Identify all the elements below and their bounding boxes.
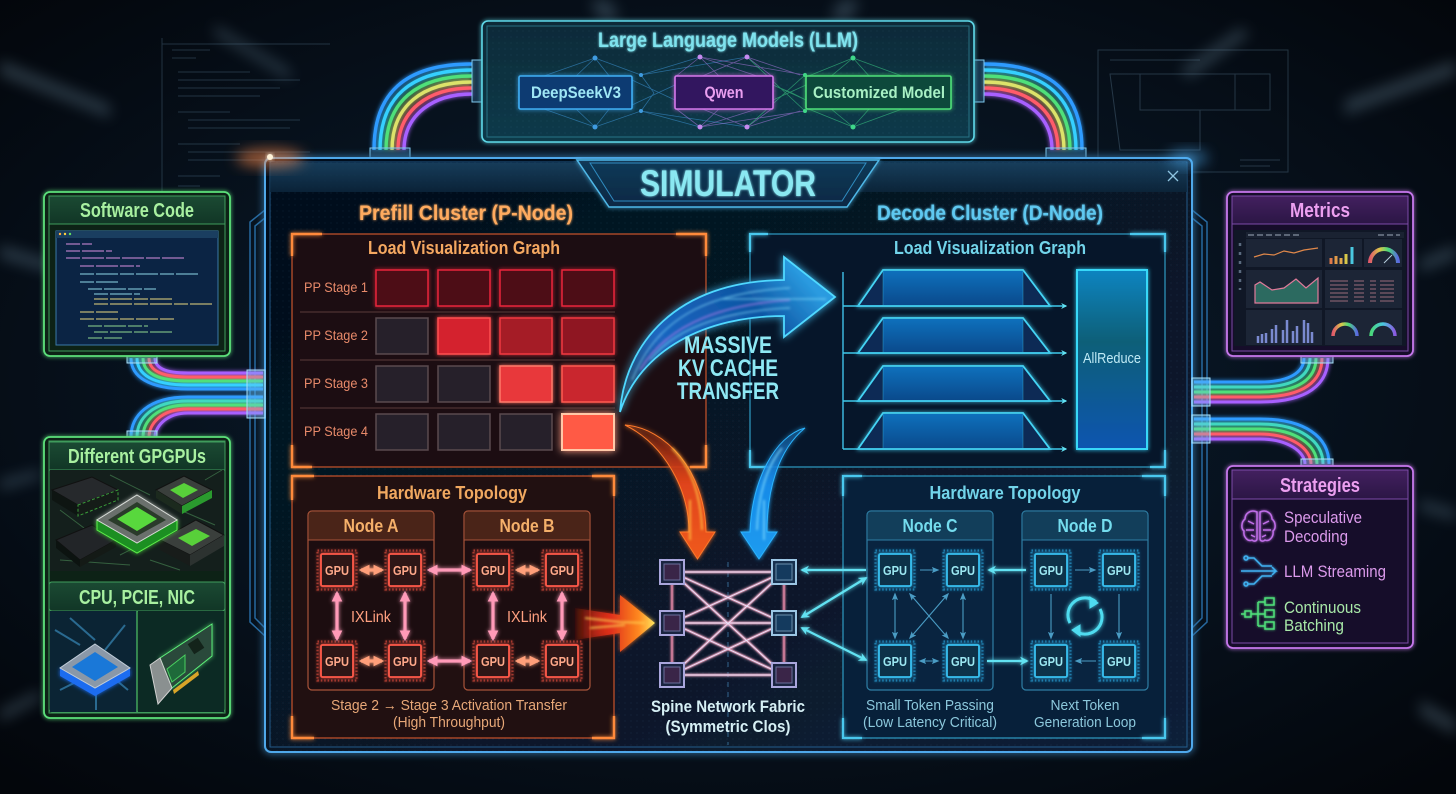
topology captions: (Low Latency Critical) (863, 714, 997, 731)
arrow: topology to spine (575, 595, 655, 652)
topology caption: (High Throughput) (393, 714, 505, 731)
Node A: GPU (325, 563, 349, 578)
stage activity heatmap (376, 270, 614, 450)
panel: Different GPGPUs and CPU (44, 437, 230, 718)
label: massive KV cache transfer: MASSIVE (684, 332, 772, 359)
connector cables: LLM to simulator left (374, 64, 472, 150)
model box: Customized Model (806, 76, 951, 109)
Node B: Node B (500, 516, 555, 536)
side cables: left (131, 358, 263, 437)
y axis (842, 272, 844, 449)
Node A (308, 511, 434, 690)
Node B: GPU (481, 654, 505, 669)
heading: Strategies (1280, 475, 1360, 497)
label: speculative decoding: Decoding (1284, 527, 1348, 546)
connector cables: LLM to simulator right (984, 64, 1082, 150)
label: continuous batching: Batching (1284, 616, 1344, 635)
arrow: massive KV cache transfer (620, 257, 835, 412)
label: speculative decoding (1284, 508, 1362, 546)
heading: Software Code (80, 200, 194, 222)
heading: Metrics (1290, 200, 1350, 222)
Node C: GPU (951, 654, 975, 669)
Node D: GPU (1107, 654, 1131, 669)
load graph heading: Load Visualization Graph (368, 238, 560, 258)
model box: DeepSeekV3: DeepSeekV3 (531, 83, 621, 102)
row labels: PP Stage 1 (304, 279, 368, 295)
image: CPU chip (50, 611, 137, 712)
fabric nodes (660, 560, 684, 584)
topology caption: Stage 2 → Stage 3 Activation Transfer (331, 697, 567, 714)
side cables: right (1194, 358, 1329, 464)
Node C: GPU (951, 563, 975, 578)
topology caption (331, 697, 567, 731)
row labels: PP Stage 4 (304, 423, 368, 439)
panel: prefill load graph (292, 234, 706, 467)
row labels: PP Stage 2 (304, 327, 368, 343)
model box: Customized Model: Customized Model (813, 83, 945, 102)
central GPU chip (97, 495, 177, 553)
Node B: IXLink (507, 609, 548, 626)
title tab (577, 160, 879, 207)
Node B: GPU (550, 563, 574, 578)
Node C: GPU (883, 654, 907, 669)
image: GPU board (50, 470, 224, 571)
Node D: GPU (1039, 654, 1063, 669)
topology captions: Small Token Passing (866, 697, 994, 714)
model box: DeepSeekV3 (519, 76, 632, 109)
fabric label (651, 697, 805, 736)
panel: Software Code (44, 192, 230, 356)
panel: decode hardware topology (843, 476, 1165, 738)
arrow: prefill to spine (625, 425, 715, 559)
panel: Strategies (1227, 466, 1413, 648)
background: faint code sheet (162, 38, 330, 200)
Node A: GPU (393, 563, 417, 578)
topology captions: Next Token (1050, 697, 1120, 714)
Node D: Node D (1058, 516, 1113, 536)
panel: prefill hardware topology (292, 476, 614, 738)
panel: Large Language Models (482, 21, 974, 142)
side brackets of simulator (250, 210, 1207, 636)
image: network card (138, 611, 224, 712)
panel: decode load graph (750, 234, 1165, 467)
fabric label: Spine Network Fabric (651, 697, 805, 716)
model box: Qwen: Qwen (704, 83, 744, 102)
Node A: GPU (325, 654, 349, 669)
Node D (1022, 511, 1148, 690)
row labels (304, 279, 368, 439)
label: massive KV cache transfer: KV CACHE (678, 355, 778, 382)
label: massive KV cache transfer: TRANSFER (677, 378, 779, 405)
code editor window (56, 231, 218, 345)
icon: streaming (1241, 556, 1276, 586)
label: LLM streaming: LLM Streaming (1284, 562, 1386, 581)
heading: CPU, PCIE, NIC (79, 587, 195, 609)
Node A: Node A (344, 516, 398, 536)
label: continuous batching: Continuous (1284, 598, 1361, 617)
heading: Prefill Cluster: Prefill Cluster (P-Node) (359, 202, 573, 225)
Node A: IXLink (351, 609, 392, 626)
label: continuous batching (1284, 598, 1361, 635)
icon: brain (1242, 511, 1275, 541)
heading: Different GPGPUs (68, 446, 206, 468)
fabric label: (Symmetric Clos) (666, 717, 790, 736)
label: massive KV cache transfer (677, 332, 779, 405)
topology heading: Hardware Topology (377, 483, 527, 503)
panel: Simulator frame (265, 158, 1192, 752)
title: SIMULATOR (640, 163, 816, 204)
Node B (464, 511, 590, 690)
load trapezoids (858, 270, 1050, 449)
arrow: decode to spine (741, 428, 805, 559)
icon: batching (1241, 598, 1274, 629)
AllReduce block (1077, 270, 1147, 449)
icon: loop (1068, 597, 1102, 636)
glare at simulator corner (236, 149, 1208, 167)
heading: Decode Cluster: Decode Cluster (D-Node) (877, 202, 1103, 225)
header band (270, 163, 1187, 192)
row labels: PP Stage 3 (304, 375, 368, 391)
LLM heading: Large Language Models (LLM) (598, 29, 858, 52)
links: spine to decode nodes (802, 570, 1027, 661)
dashboard preview (1234, 230, 1406, 346)
Node C: GPU (883, 563, 907, 578)
spine network fabric (651, 560, 805, 736)
topology heading: Hardware Topology (930, 483, 1080, 503)
fabric links (672, 572, 784, 675)
load plateaus (883, 271, 1023, 448)
neural network mesh (541, 54, 905, 130)
Node D: GPU (1107, 563, 1131, 578)
time axes (843, 270, 1066, 449)
AllReduce block: AllReduce (1083, 350, 1141, 367)
load graph heading: Load Visualization Graph (894, 238, 1086, 258)
Node D: GPU (1039, 563, 1063, 578)
Node A: GPU (393, 654, 417, 669)
cable connectors: top (370, 60, 1086, 158)
model box: Qwen (675, 76, 773, 109)
Node C: Node C (902, 516, 958, 536)
Node B: GPU (550, 654, 574, 669)
close icon (1168, 171, 1178, 181)
cable connectors: sides (127, 356, 1333, 466)
Node C (867, 511, 993, 690)
background: faint blueprint sheet (1098, 50, 1288, 172)
sub-panel: CPU PCIE NIC (49, 582, 225, 712)
Node B: GPU (481, 563, 505, 578)
topology captions (863, 697, 1136, 731)
GPU links (337, 570, 562, 661)
topology captions: Generation Loop (1034, 714, 1136, 731)
label: speculative decoding: Speculative (1284, 508, 1362, 527)
divider: dashed centre line (727, 212, 729, 745)
panel: Metrics (1227, 192, 1413, 356)
